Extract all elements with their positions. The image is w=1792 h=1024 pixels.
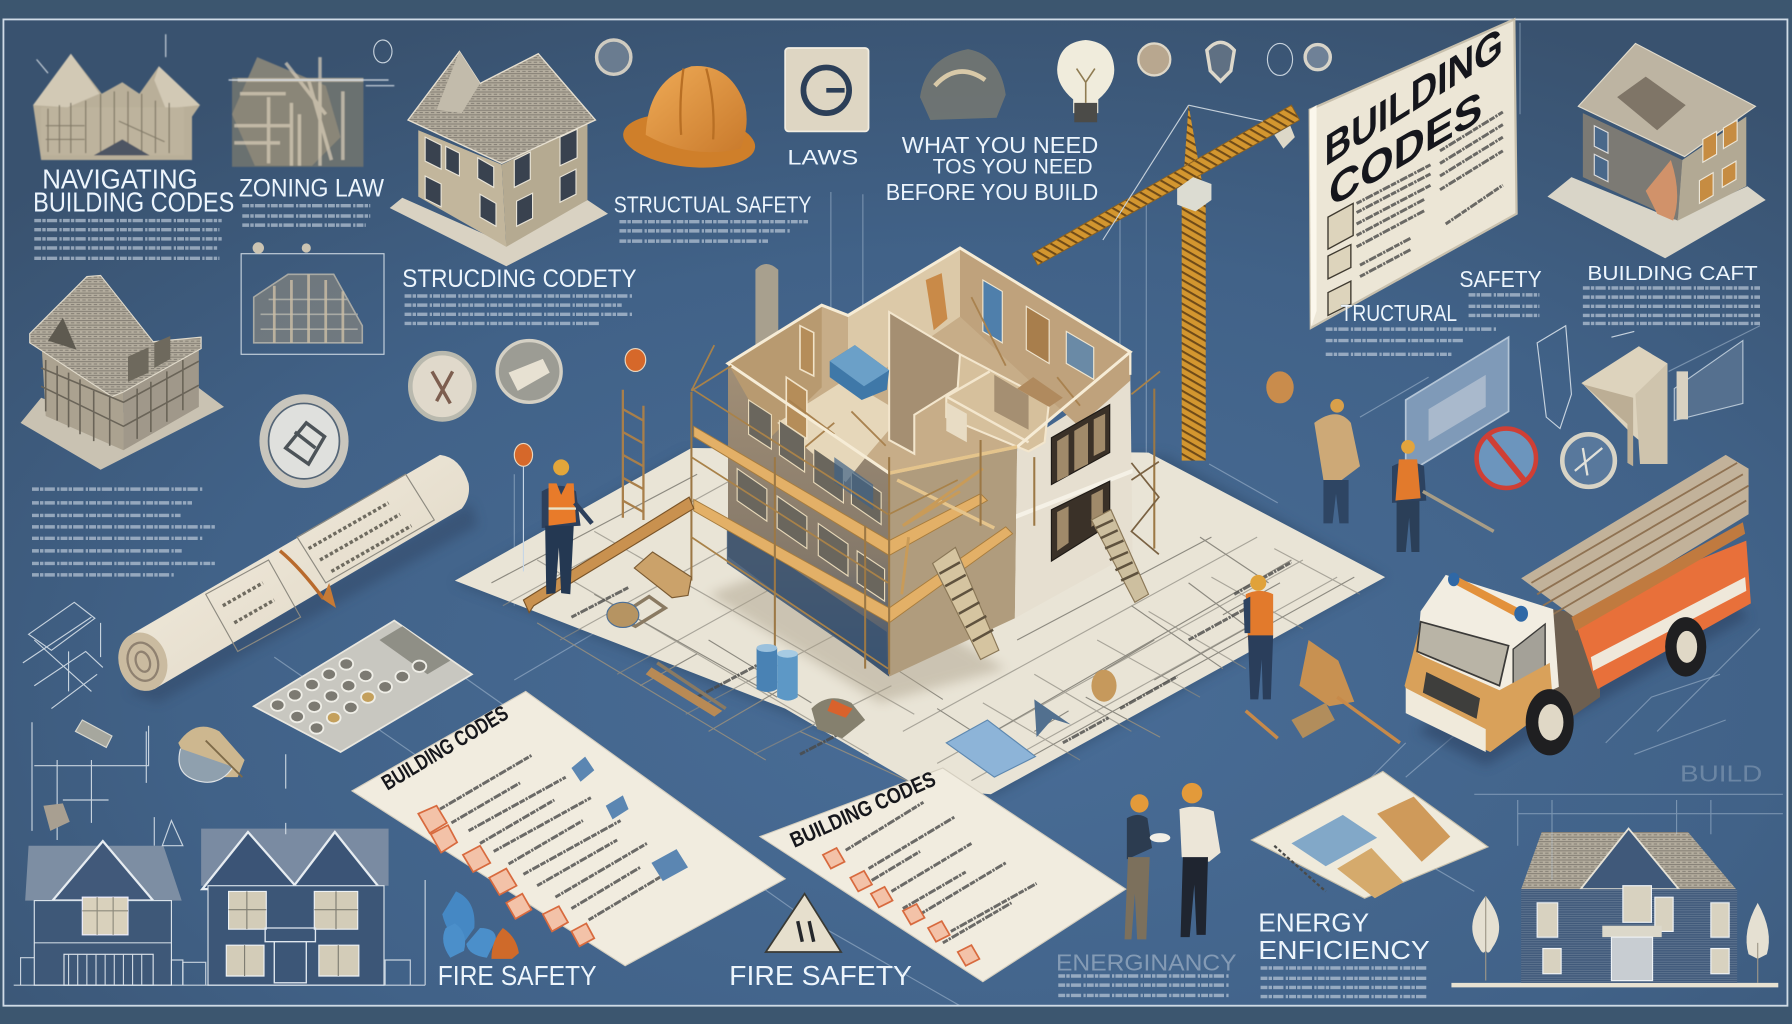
text block: structural bbox=[619, 222, 808, 241]
hard hat bbox=[620, 66, 758, 174]
heading: Navigating Building Codes: NAVIGATING bbox=[42, 164, 198, 195]
illustration: ladder bbox=[623, 390, 643, 520]
facade windows bbox=[737, 400, 885, 601]
icon: prohibition sign bbox=[1477, 429, 1536, 488]
sign plaque bbox=[1406, 337, 1509, 474]
left scaffolded facade bbox=[728, 363, 889, 677]
illustration: calculator bbox=[254, 621, 472, 752]
checklist 1 bbox=[352, 691, 785, 966]
illustration: building under construction bbox=[691, 248, 1160, 677]
heading: Navigating Building Codes bbox=[33, 164, 234, 217]
title: What you need before you build: TOS YOU NEED bbox=[933, 154, 1093, 179]
title: What you need before you build: WHAT YOU NEED bbox=[902, 132, 1098, 158]
worker in tan coat bbox=[1314, 399, 1360, 523]
illustration: blueprint house 1 bbox=[21, 821, 183, 985]
pins and markers bbox=[514, 349, 1294, 571]
illustration: crane bbox=[1032, 105, 1299, 461]
label: Energy Efficiency: ENFICIENCY bbox=[1258, 935, 1430, 965]
sketch: zoning site bbox=[229, 57, 394, 167]
label: Energy Efficiency: ENERGY bbox=[1258, 907, 1369, 937]
label: Fire Safety second: FIRE SAFETY bbox=[729, 960, 912, 991]
label: Fire Safety: FIRE SAFETY bbox=[438, 960, 597, 991]
front stairs bbox=[933, 547, 999, 659]
worker with vest bbox=[542, 459, 592, 594]
label: Build: BUILD bbox=[1680, 761, 1762, 787]
text block: building bbox=[1583, 288, 1760, 323]
label: Laws: LAWS bbox=[787, 145, 858, 170]
illustration: isometric house bbox=[390, 51, 608, 266]
label: Structural Safety: STRUCTUAL SAFETY bbox=[614, 192, 811, 218]
tan side face bbox=[889, 447, 1017, 677]
illustration: large beige house bbox=[21, 275, 224, 470]
icon: law seal square bbox=[785, 48, 869, 131]
checklist 2: BUILDING CODES bbox=[786, 766, 939, 853]
icon: light bulb bbox=[1057, 40, 1114, 122]
label: Energy Efficiency bbox=[1258, 907, 1430, 965]
sketch: blueprint box bbox=[241, 242, 384, 354]
small document bbox=[1251, 771, 1488, 898]
icon: circle sign bbox=[1562, 434, 1615, 487]
scaffold poles bbox=[691, 389, 1154, 674]
label: Building Cafe: BUILDING CAFT bbox=[1587, 262, 1758, 285]
text block: structure bbox=[405, 296, 633, 323]
worker with vest right bbox=[1392, 440, 1494, 552]
illustration: beam and bench bbox=[523, 497, 694, 613]
icon: warning triangle bbox=[766, 894, 841, 952]
illustration: blueprint house 2 bbox=[14, 754, 425, 985]
icon: small round badges top row bbox=[374, 40, 1330, 81]
worker lower bbox=[1243, 575, 1273, 699]
illustration: rolled blueprint bbox=[111, 455, 478, 703]
label: Energy Efficiency dim: ENERGINANCY bbox=[1056, 949, 1237, 975]
text block: intro bbox=[34, 221, 222, 258]
title: What you need before you build: BEFORE YOU BUILD bbox=[886, 179, 1098, 205]
sketch: utility line bbox=[1518, 674, 1783, 880]
cream front face bbox=[1015, 374, 1133, 618]
checklist 1: BUILDING CODES bbox=[377, 700, 512, 795]
label: Safety: SAFETY bbox=[1459, 266, 1542, 292]
icon: round badges left bbox=[259, 341, 561, 488]
roof interior bbox=[728, 248, 1130, 473]
text block: left lower bbox=[32, 489, 215, 575]
text block: zoning bbox=[242, 206, 370, 225]
poster: Building Codes bbox=[1310, 17, 1517, 328]
cream wall windows bbox=[1051, 405, 1110, 561]
panel: central plan sheet bbox=[455, 448, 1385, 797]
parapet outline bbox=[728, 248, 1130, 473]
text block: safety bbox=[1326, 295, 1539, 354]
icon: blue flame group bbox=[442, 891, 519, 959]
text block: energy bbox=[1261, 968, 1426, 997]
illustration: finished house with trees bbox=[1451, 829, 1778, 987]
illustration: fire truck bbox=[1405, 455, 1751, 766]
right stairs bbox=[1091, 510, 1149, 602]
text block: energy dim bbox=[1058, 976, 1230, 995]
room partitions bbox=[889, 312, 960, 454]
label: Structural: TRUCTURAL bbox=[1341, 300, 1457, 326]
tools bbox=[1246, 640, 1400, 743]
title: What you need before you build bbox=[886, 132, 1098, 205]
sketch: helmet bbox=[920, 49, 1006, 120]
illustration: wall block bbox=[1537, 326, 1743, 466]
wood platforms bbox=[694, 426, 987, 555]
sketches: lower left details bbox=[23, 602, 245, 846]
two people talking bbox=[1125, 783, 1221, 939]
poster: Building Codes: CODES bbox=[1329, 81, 1482, 217]
chimney bbox=[755, 264, 778, 347]
heading: Strucding Codety: STRUCDING CODETY bbox=[402, 265, 637, 293]
poster: Building Codes: BUILDING bbox=[1325, 17, 1503, 177]
heading: Navigating Building Codes: BUILDING CODES bbox=[33, 186, 234, 217]
checklist 2 bbox=[760, 766, 1126, 982]
sketch: framed house bbox=[33, 34, 200, 160]
heading: Zoning Law: ZONING LAW bbox=[239, 175, 384, 203]
illustration: barrels bbox=[757, 644, 798, 701]
illustration: damaged house bbox=[1547, 43, 1766, 258]
